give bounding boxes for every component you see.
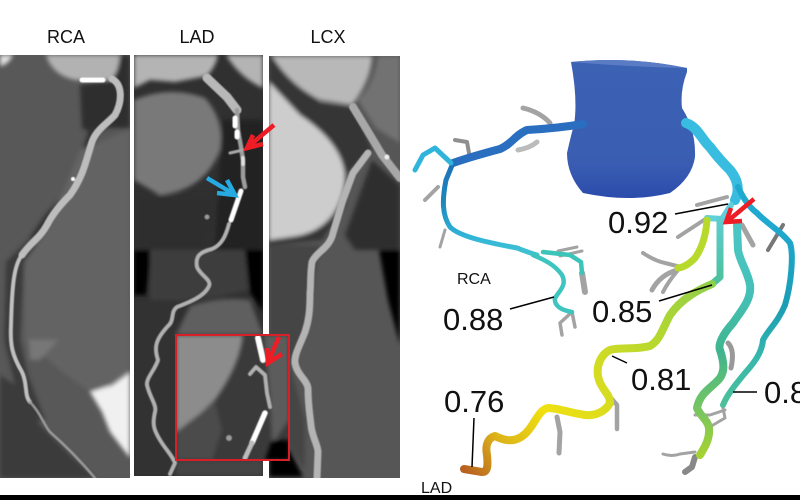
leader lines and value labels — [421, 199, 800, 497]
label: 0.85: 0.85 — [592, 294, 652, 329]
label: 0.92: 0.92 — [608, 205, 668, 240]
vessel — [147, 78, 245, 474]
heading: RCA: RCA — [47, 27, 85, 47]
3D model: side branches — [425, 108, 783, 472]
heading: LAD: LAD — [179, 27, 215, 47]
arrow: red on LAD — [247, 125, 274, 148]
panel: LCX CT image — [269, 56, 400, 478]
arrow: red on 3D model — [726, 199, 754, 222]
label: 0.76 — [444, 384, 504, 467]
bottom bar — [0, 495, 800, 500]
3D model: aorta — [567, 60, 695, 198]
label: 0.8 — [733, 375, 800, 410]
3D model: RCA tree — [415, 124, 583, 312]
panel: inset magnified lesion — [176, 335, 289, 460]
label: 0.81: 0.81 — [631, 362, 691, 397]
3D model: left coronary tree — [464, 123, 792, 472]
label: 0.85 — [592, 285, 712, 329]
panel: RCA CT image — [0, 55, 130, 478]
label: RCA: RCA — [457, 271, 491, 288]
heading: LCX: LCX — [310, 27, 346, 47]
label: 0.81 — [612, 356, 691, 397]
label: 0.88: 0.88 — [443, 302, 503, 337]
panel: LAD CT image — [134, 55, 263, 476]
vessel — [11, 79, 120, 478]
label: LAD: LAD — [421, 480, 452, 497]
panel titles — [47, 27, 346, 47]
vessel — [295, 107, 400, 478]
label: 0.92 — [608, 204, 728, 240]
label: 0.76: 0.76 — [444, 384, 504, 419]
arrow: red in inset — [267, 337, 282, 363]
arrow: blue on LAD — [207, 178, 235, 195]
label: 0.88 — [443, 297, 554, 337]
